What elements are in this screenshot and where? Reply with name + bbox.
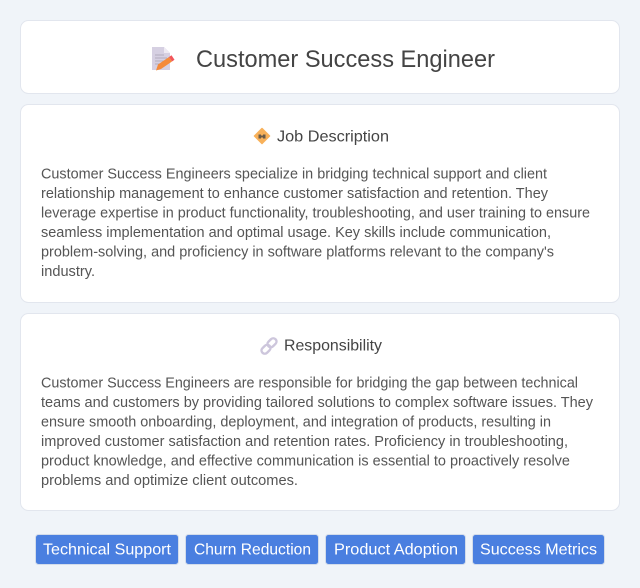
tag: churn reduction — [186, 534, 318, 564]
icon: chain link — [260, 337, 278, 355]
panel: responsibility — [20, 314, 620, 510]
panel: header — [20, 20, 620, 94]
tag: technical support: Technical Support — [43, 542, 172, 558]
icon: orange diamond — [254, 128, 270, 144]
text block: responsibility: product knowledge, and effective communication is essential to proactively resolve — [41, 454, 570, 470]
heading: responsibility: Responsibility — [284, 338, 382, 354]
text block: job description: Customer Success Engineers specialize in bridging technical support and client — [41, 166, 547, 182]
text block: responsibility: ensure smooth onboarding, deployment, and integration of products, resulting in — [41, 414, 551, 430]
tag: product adoption — [326, 534, 466, 564]
tag: technical support — [36, 534, 178, 564]
text block: responsibility: improved customer satisfaction and retention rates. Proficiency in troubleshooting, — [41, 434, 568, 450]
heading: job description: Job Description — [277, 128, 389, 146]
text block: job description: problem-solving, and proficiency in software platforms relevant to the company's — [41, 244, 554, 260]
text block: responsibility: problems and optimize client outcomes. — [41, 473, 298, 489]
tag: product adoption: Product Adoption — [334, 542, 458, 558]
text block: responsibility — [41, 376, 594, 489]
text block: job description: relationship management to enhance customer satisfaction and retention. They — [41, 186, 549, 202]
text block: job description: industry. — [41, 264, 95, 280]
tag row — [36, 534, 604, 564]
text block: responsibility: teams and customers by providing tailored solutions to complex software issues. They — [41, 395, 594, 411]
title: Customer Success Engineer — [196, 46, 495, 73]
panel: job description — [20, 104, 620, 302]
tag: success metrics: Success Metrics — [480, 542, 597, 558]
tag: success metrics — [472, 534, 604, 564]
icon: document with pencil — [152, 47, 174, 70]
tag: churn reduction: Churn Reduction — [194, 542, 311, 558]
text block: job description — [41, 166, 590, 280]
text block: job description: seamless implementation and optimal usage. Key skills include communication, — [41, 225, 551, 241]
text block: responsibility: Customer Success Engineers are responsible for bridging the gap between technical — [41, 376, 578, 392]
text block: job description: leverage expertise in product functionality, troubleshooting, and user training to ensure — [41, 206, 590, 222]
